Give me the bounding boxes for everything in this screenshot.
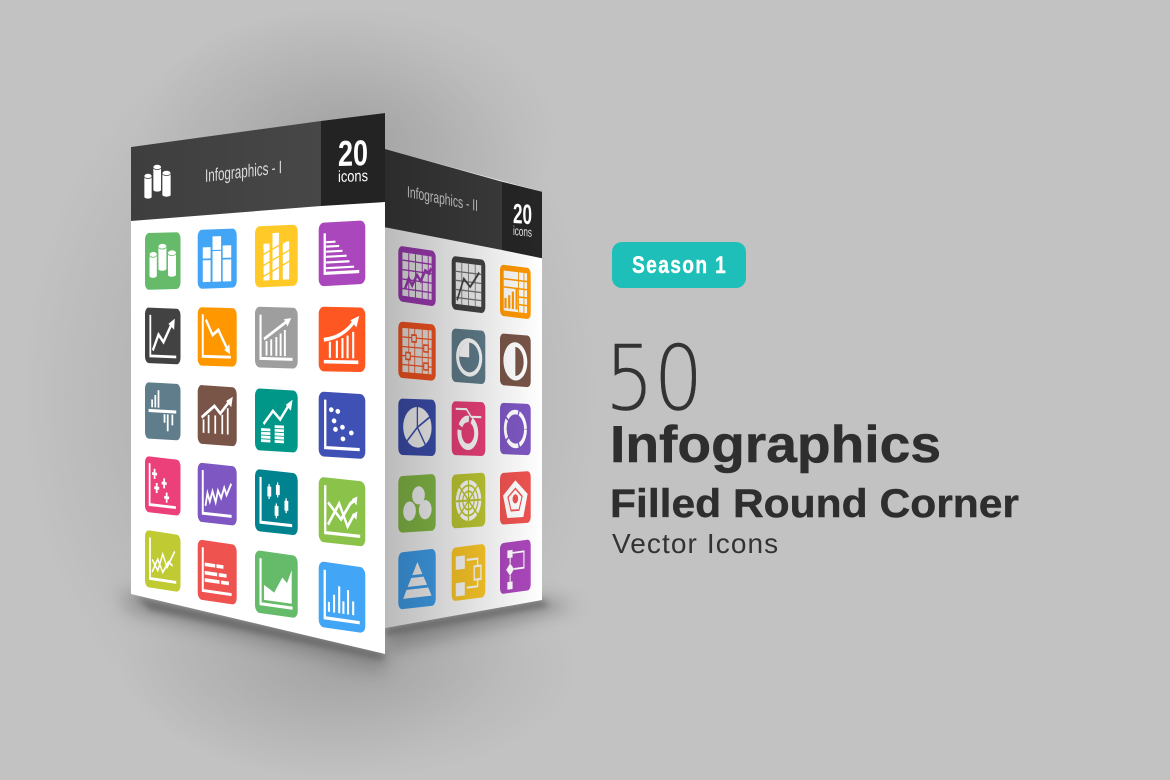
shading over right page <box>385 149 542 628</box>
label: Infographics - II: Infographics - II <box>407 183 478 215</box>
icon: blue thin bars <box>319 561 365 633</box>
counter caption: icons <box>338 168 368 186</box>
icon: purple grid chart <box>398 246 436 307</box>
icon: purple wavy line <box>198 462 237 526</box>
counter box <box>321 113 385 206</box>
counter number: 20 <box>513 198 532 230</box>
icon: slate mirrored bars <box>145 382 180 440</box>
label: Infographics - I: Infographics - I <box>205 157 282 186</box>
icon: indigo scatter plot <box>319 391 365 459</box>
contact shadow under panels <box>135 596 384 660</box>
icon: teal coins with arrow <box>255 388 298 453</box>
badge: Season 1 <box>612 242 746 288</box>
page body <box>131 113 385 654</box>
counter number: 20 <box>338 132 368 174</box>
icon: orange falling line <box>198 307 237 367</box>
counter box <box>502 182 542 258</box>
icon: lime double wave <box>145 530 180 592</box>
panel: Infographics I (left page) <box>131 113 385 654</box>
subtitle: Filled Round Corner: Filled Round Corner <box>610 482 1019 526</box>
icon: dark rising line <box>145 307 180 364</box>
icon: orange table with bars <box>500 264 531 319</box>
contact shadow right <box>385 600 550 636</box>
top shadow blob <box>140 5 560 265</box>
icon: red-orange grid with nodes <box>398 321 436 381</box>
soft shadow behind panels <box>20 10 600 780</box>
icon: pink ring with line <box>452 401 485 456</box>
counter caption: icons <box>513 223 532 240</box>
title: Infographics: Infographics <box>610 416 941 474</box>
icon: brown bars with arrow <box>198 385 237 446</box>
icon: lime radial target <box>452 472 485 528</box>
icon: pink plus plot <box>145 456 180 516</box>
icon: purple flow chart <box>500 539 531 594</box>
header bar <box>131 121 321 221</box>
icon: yellow flow chart <box>452 544 485 601</box>
icon: green area chart <box>255 550 298 618</box>
icon: gray bars with arrow <box>255 307 298 369</box>
icon: red radar pentagon <box>500 471 531 525</box>
icon: indigo pie chart <box>398 398 436 456</box>
icon: green cylinders <box>145 232 180 290</box>
icon: green double zigzag <box>319 477 365 547</box>
icon: dark grid chart <box>452 256 485 313</box>
badge: Season 1: Season 1 <box>632 251 727 279</box>
icon: purple segmented ring <box>500 403 531 455</box>
caption: Vector Icons: Vector Icons <box>612 528 779 559</box>
title number: 50: 50 <box>605 326 703 430</box>
icon: three cylinders <box>144 164 171 199</box>
bottom shadow blob <box>120 560 580 780</box>
floor shadow right <box>385 598 578 652</box>
icon: purple descending bars <box>319 220 365 286</box>
icon: brown half circle <box>500 333 531 387</box>
icon: yellow hatched bars <box>255 225 298 288</box>
page body <box>385 149 542 628</box>
icon: slate ring with quadrant <box>452 328 485 384</box>
icon: blue pyramid <box>398 549 436 610</box>
icon: red horizontal bars <box>198 539 237 605</box>
floor shadow under panels <box>118 590 385 672</box>
icon: three green circles <box>398 474 436 533</box>
icon: blue bar chart <box>198 228 237 289</box>
header bar <box>385 149 502 250</box>
icon: teal candlesticks <box>255 469 298 536</box>
icon: red-orange bars with curved arrow <box>319 307 365 372</box>
panel: Infographics II (right page) <box>385 149 542 628</box>
